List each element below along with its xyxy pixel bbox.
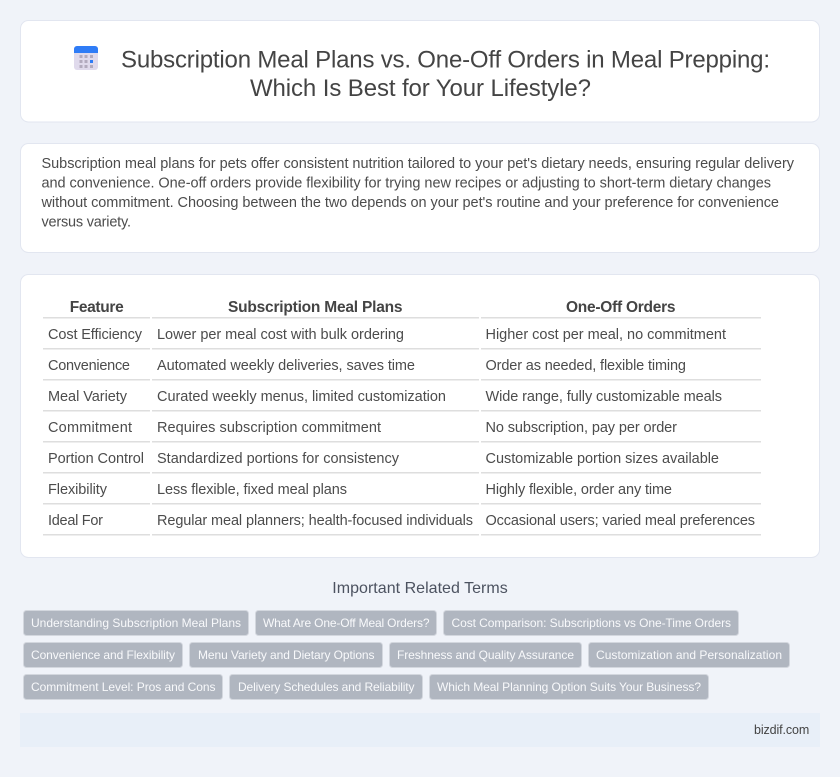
tag: Understanding Subscription Meal Plans xyxy=(31,616,241,630)
tag: Convenience and Flexibility xyxy=(31,648,175,662)
text block: summary paragraph xyxy=(40,156,795,230)
tag xyxy=(24,610,248,636)
title: Subscription Meal Plans vs. One-Off Orders in Meal Prepping: xyxy=(121,46,770,74)
tag xyxy=(24,642,182,668)
table row: flexibility: Less flexible, fixed meal plans xyxy=(157,482,347,498)
table row: ideal for: Regular meal planners; health-focused individuals xyxy=(157,513,473,529)
table row: portion control: Portion Control xyxy=(48,451,144,467)
tag xyxy=(588,642,790,668)
table: header row: One-Off Orders xyxy=(566,299,676,316)
table row: commitment xyxy=(43,420,761,442)
footer text: site name: bizdif.com xyxy=(754,723,809,737)
table row: convenience: Automated weekly deliveries, saves time xyxy=(157,358,415,374)
table row: ideal for xyxy=(43,513,761,536)
table row: meal variety xyxy=(43,389,761,412)
table row: commitment: No subscription, pay per order xyxy=(486,420,677,436)
text block: summary paragraph: Subscription meal plans for pets offer consistent nutrition tailored to your pet's dietary needs, ensuring regular delivery xyxy=(42,156,795,172)
tags: related terms xyxy=(24,610,790,700)
table row: meal variety: Curated weekly menus, limited customization xyxy=(157,389,446,405)
table row: commitment: Requires subscription commitment xyxy=(157,420,381,436)
table row: convenience: Order as needed, flexible timing xyxy=(486,358,686,374)
table row: commitment: Commitment xyxy=(48,420,132,436)
table row: convenience: Convenience xyxy=(48,358,130,374)
icon: calendar xyxy=(74,46,98,70)
panel: comparison table card xyxy=(20,274,820,558)
table row: cost efficiency: Higher cost per meal, no commitment xyxy=(486,327,726,343)
table row: portion control: Standardized portions for consistency xyxy=(157,451,400,467)
table row: flexibility xyxy=(43,482,761,504)
table: header row: Subscription Meal Plans xyxy=(228,299,402,316)
footer bar xyxy=(20,713,820,747)
tag: Delivery Schedules and Reliability xyxy=(238,680,414,694)
tag xyxy=(444,610,738,636)
table row: flexibility: Highly flexible, order any time xyxy=(486,482,672,498)
table row: meal variety: Meal Variety xyxy=(48,389,128,405)
tag xyxy=(430,674,708,700)
tag: Cost Comparison: Subscriptions vs One-Time Orders xyxy=(452,616,731,630)
text block: summary paragraph: and convenience. One-off orders provide flexibility for trying new recipes or adjusting to short-term dietary changes xyxy=(42,176,771,192)
tag: What Are One-Off Meal Orders? xyxy=(263,616,430,630)
tag xyxy=(256,610,436,636)
table row: ideal for: Ideal For xyxy=(48,513,103,529)
panel: title card xyxy=(20,20,820,122)
text block: summary paragraph: versus variety. xyxy=(42,214,131,230)
tag xyxy=(230,674,422,700)
tag: Menu Variety and Dietary Options xyxy=(198,648,374,662)
tag: Which Meal Planning Option Suits Your Business? xyxy=(437,680,701,694)
table row: cost efficiency xyxy=(43,327,761,350)
table row: portion control xyxy=(43,451,761,474)
title: Which Is Best for Your Lifestyle? xyxy=(250,75,591,102)
title xyxy=(121,46,770,102)
tag xyxy=(390,642,582,668)
table row: convenience xyxy=(43,358,761,380)
tag: Customization and Personalization xyxy=(596,648,782,662)
table row: meal variety: Wide range, fully customizable meals xyxy=(486,389,722,405)
table row: flexibility: Flexibility xyxy=(48,482,108,498)
table row: ideal for: Occasional users; varied meal preferences xyxy=(486,513,755,529)
text block: summary paragraph: without commitment. Choosing between the two depends on your pet's routine and your preference for convenience xyxy=(40,195,779,211)
table row: cost efficiency: Cost Efficiency xyxy=(48,327,143,343)
table: header row: Feature xyxy=(70,299,124,316)
tag xyxy=(24,674,222,700)
tag: Freshness and Quality Assurance xyxy=(397,648,574,662)
table row: portion control: Customizable portion sizes available xyxy=(486,451,719,467)
tag: Commitment Level: Pros and Cons xyxy=(31,680,216,694)
table: header row xyxy=(43,299,761,318)
panel: summary card xyxy=(20,144,820,252)
heading: important related terms: Important Related Terms xyxy=(332,580,508,597)
tag xyxy=(190,642,382,668)
table row: cost efficiency: Lower per meal cost with bulk ordering xyxy=(157,327,404,343)
